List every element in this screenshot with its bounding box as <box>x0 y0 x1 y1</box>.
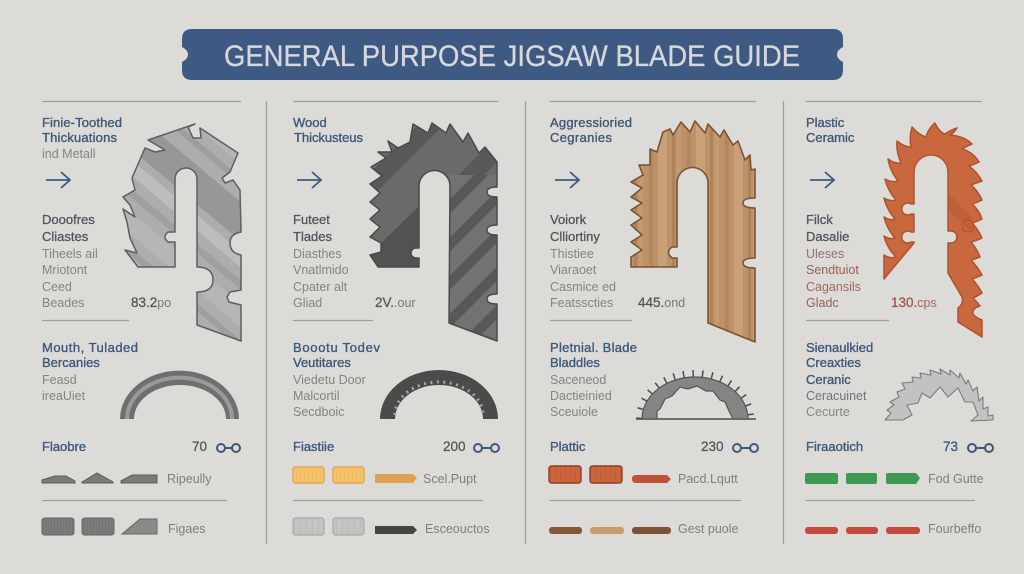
shapes row 1: Fod Gutte <box>928 472 984 486</box>
heading: fine-toothed: ind Metall <box>42 147 96 161</box>
subheading: Saceneod <box>550 373 606 387</box>
material row: 73 <box>943 439 958 454</box>
subheading: Ceracuinet <box>806 389 867 403</box>
shapes row 1: Scel.Pupt <box>423 472 477 486</box>
material row <box>293 439 499 454</box>
specs text: Voiork <box>550 212 587 227</box>
subheading: Sienaulkied <box>806 340 873 355</box>
arrow <box>555 172 579 188</box>
heading: aggressive: Aggressioried <box>550 115 632 130</box>
specs text: Tiheels ail <box>42 247 98 261</box>
specs text: Dasalie <box>806 229 849 244</box>
specs text <box>42 212 98 310</box>
subheading: Sceuiole <box>550 405 598 419</box>
arch: stepped teeth <box>636 374 756 419</box>
material row: Firaaotich <box>806 439 863 454</box>
subheading: Viedetu Door <box>293 373 366 387</box>
specs text: Tlades <box>293 229 333 244</box>
panel: column 3 <box>549 115 758 536</box>
material row: 230 <box>701 439 724 454</box>
title banner <box>182 29 843 80</box>
specs text: Sendtuiot <box>806 263 859 277</box>
material row: 70 <box>192 439 207 454</box>
specs text: Futeet <box>293 212 330 227</box>
specs text: Diasthes <box>293 247 342 261</box>
shapes row 2: Fourbeffo <box>928 522 981 536</box>
shapes row 2 <box>549 522 739 536</box>
subheading: Pletnial. Blade <box>550 340 637 355</box>
heading: wood <box>293 115 364 145</box>
subheading: Feasd <box>42 373 77 387</box>
panel: column 4 <box>805 115 993 536</box>
specs text: Uleses <box>806 247 844 261</box>
panel: column 1 <box>42 115 241 536</box>
heading: fine-toothed <box>42 115 122 161</box>
material row <box>806 439 993 454</box>
heading: aggressive <box>550 115 632 145</box>
subheading <box>550 340 637 419</box>
arrow <box>297 172 321 188</box>
column dividers <box>42 101 982 544</box>
shapes row 2: Esceouctos <box>425 522 490 536</box>
specs text: Cliastes <box>42 229 89 244</box>
specs text: Dooofres <box>42 212 95 227</box>
subheading: ireaUiet <box>42 389 86 403</box>
heading: wood: Wood <box>293 115 327 130</box>
blade: dark <box>369 122 498 342</box>
shapes row 2 <box>42 518 206 536</box>
subheading <box>42 340 138 403</box>
specs text: Gladc <box>806 296 839 310</box>
blade: wood <box>631 121 755 342</box>
material row <box>42 439 240 454</box>
specs text: Gliad <box>293 296 322 310</box>
blade: steel <box>123 124 241 341</box>
value: 83.2po <box>131 295 171 310</box>
value: 2V..our <box>375 295 416 310</box>
specs text: Featsscties <box>550 296 613 310</box>
subheading: Boootu Todev <box>293 340 380 355</box>
subheading: Malcortil <box>293 389 340 403</box>
specs text <box>293 212 349 310</box>
specs text: Filck <box>806 212 833 227</box>
specs text: Clliortiny <box>550 229 600 244</box>
heading: plastic ceramic: Ceramic <box>806 130 855 145</box>
arch: smooth blade <box>120 371 239 419</box>
subheading: Creaxties <box>806 355 861 370</box>
shapes row 2 <box>805 522 981 536</box>
specs text: Beades <box>42 296 84 310</box>
shapes row 2: Gest puole <box>678 522 739 536</box>
subheading: Bladdles <box>550 355 600 370</box>
subheading: Dactieinied <box>550 389 612 403</box>
shapes row 1 <box>805 472 984 486</box>
arch: toothed dark <box>380 370 498 419</box>
subheading <box>293 340 380 419</box>
heading: wood: Thickusteus <box>294 130 364 145</box>
specs text: Casmice ed <box>550 280 616 294</box>
specs text: Cpater alt <box>293 280 348 294</box>
value: 445.ond <box>638 295 685 310</box>
specs text: Cagansils <box>806 280 861 294</box>
heading: plastic ceramic <box>806 115 855 145</box>
subheading: Cecurte <box>806 405 850 419</box>
specs text: Thistiee <box>550 247 594 261</box>
heading: aggressive: Cegranies <box>550 130 612 145</box>
title banner: GENERAL PURPOSE JIGSAW BLADE GUIDE <box>224 40 800 73</box>
arch: serrated light <box>885 369 993 421</box>
material row <box>550 439 758 454</box>
specs text <box>550 212 616 310</box>
material row: Plattic <box>550 439 586 454</box>
heading: fine-toothed: Finie-Toothed <box>42 115 122 130</box>
material row: Fiastiie <box>293 439 334 454</box>
specs text: Vnatlmido <box>293 263 349 277</box>
specs text: Mriotont <box>42 263 88 277</box>
shapes row 1 <box>549 466 738 486</box>
panel: column 2 <box>293 115 503 536</box>
heading: plastic ceramic: Plastic <box>806 115 845 130</box>
shapes row 1 <box>293 467 477 486</box>
material row: Flaobre <box>42 439 86 454</box>
shapes row 1: Ripeully <box>167 472 212 486</box>
value: 130.cps <box>891 295 937 310</box>
subheading: Veutitares <box>293 355 351 370</box>
shapes row 2: Figaes <box>168 522 206 536</box>
shapes row 1: Pacd.Lqutt <box>678 472 738 486</box>
shapes row 1 <box>42 472 212 486</box>
shapes row 2 <box>293 518 490 536</box>
subheading: Secdboic <box>293 405 344 419</box>
subheading: Bercanies <box>42 355 100 370</box>
heading: fine-toothed: Thickuations <box>42 130 118 145</box>
specs text: Ceed <box>42 280 72 294</box>
arrow <box>46 172 70 188</box>
arrow <box>810 172 834 188</box>
material row: 200 <box>443 439 466 454</box>
subheading: Ceranic <box>806 372 851 387</box>
subheading: Mouth, Tuladed <box>42 340 138 355</box>
specs text <box>806 212 861 310</box>
specs text: Viaraoet <box>550 263 597 277</box>
subheading <box>806 340 873 419</box>
blade: red <box>884 123 982 337</box>
